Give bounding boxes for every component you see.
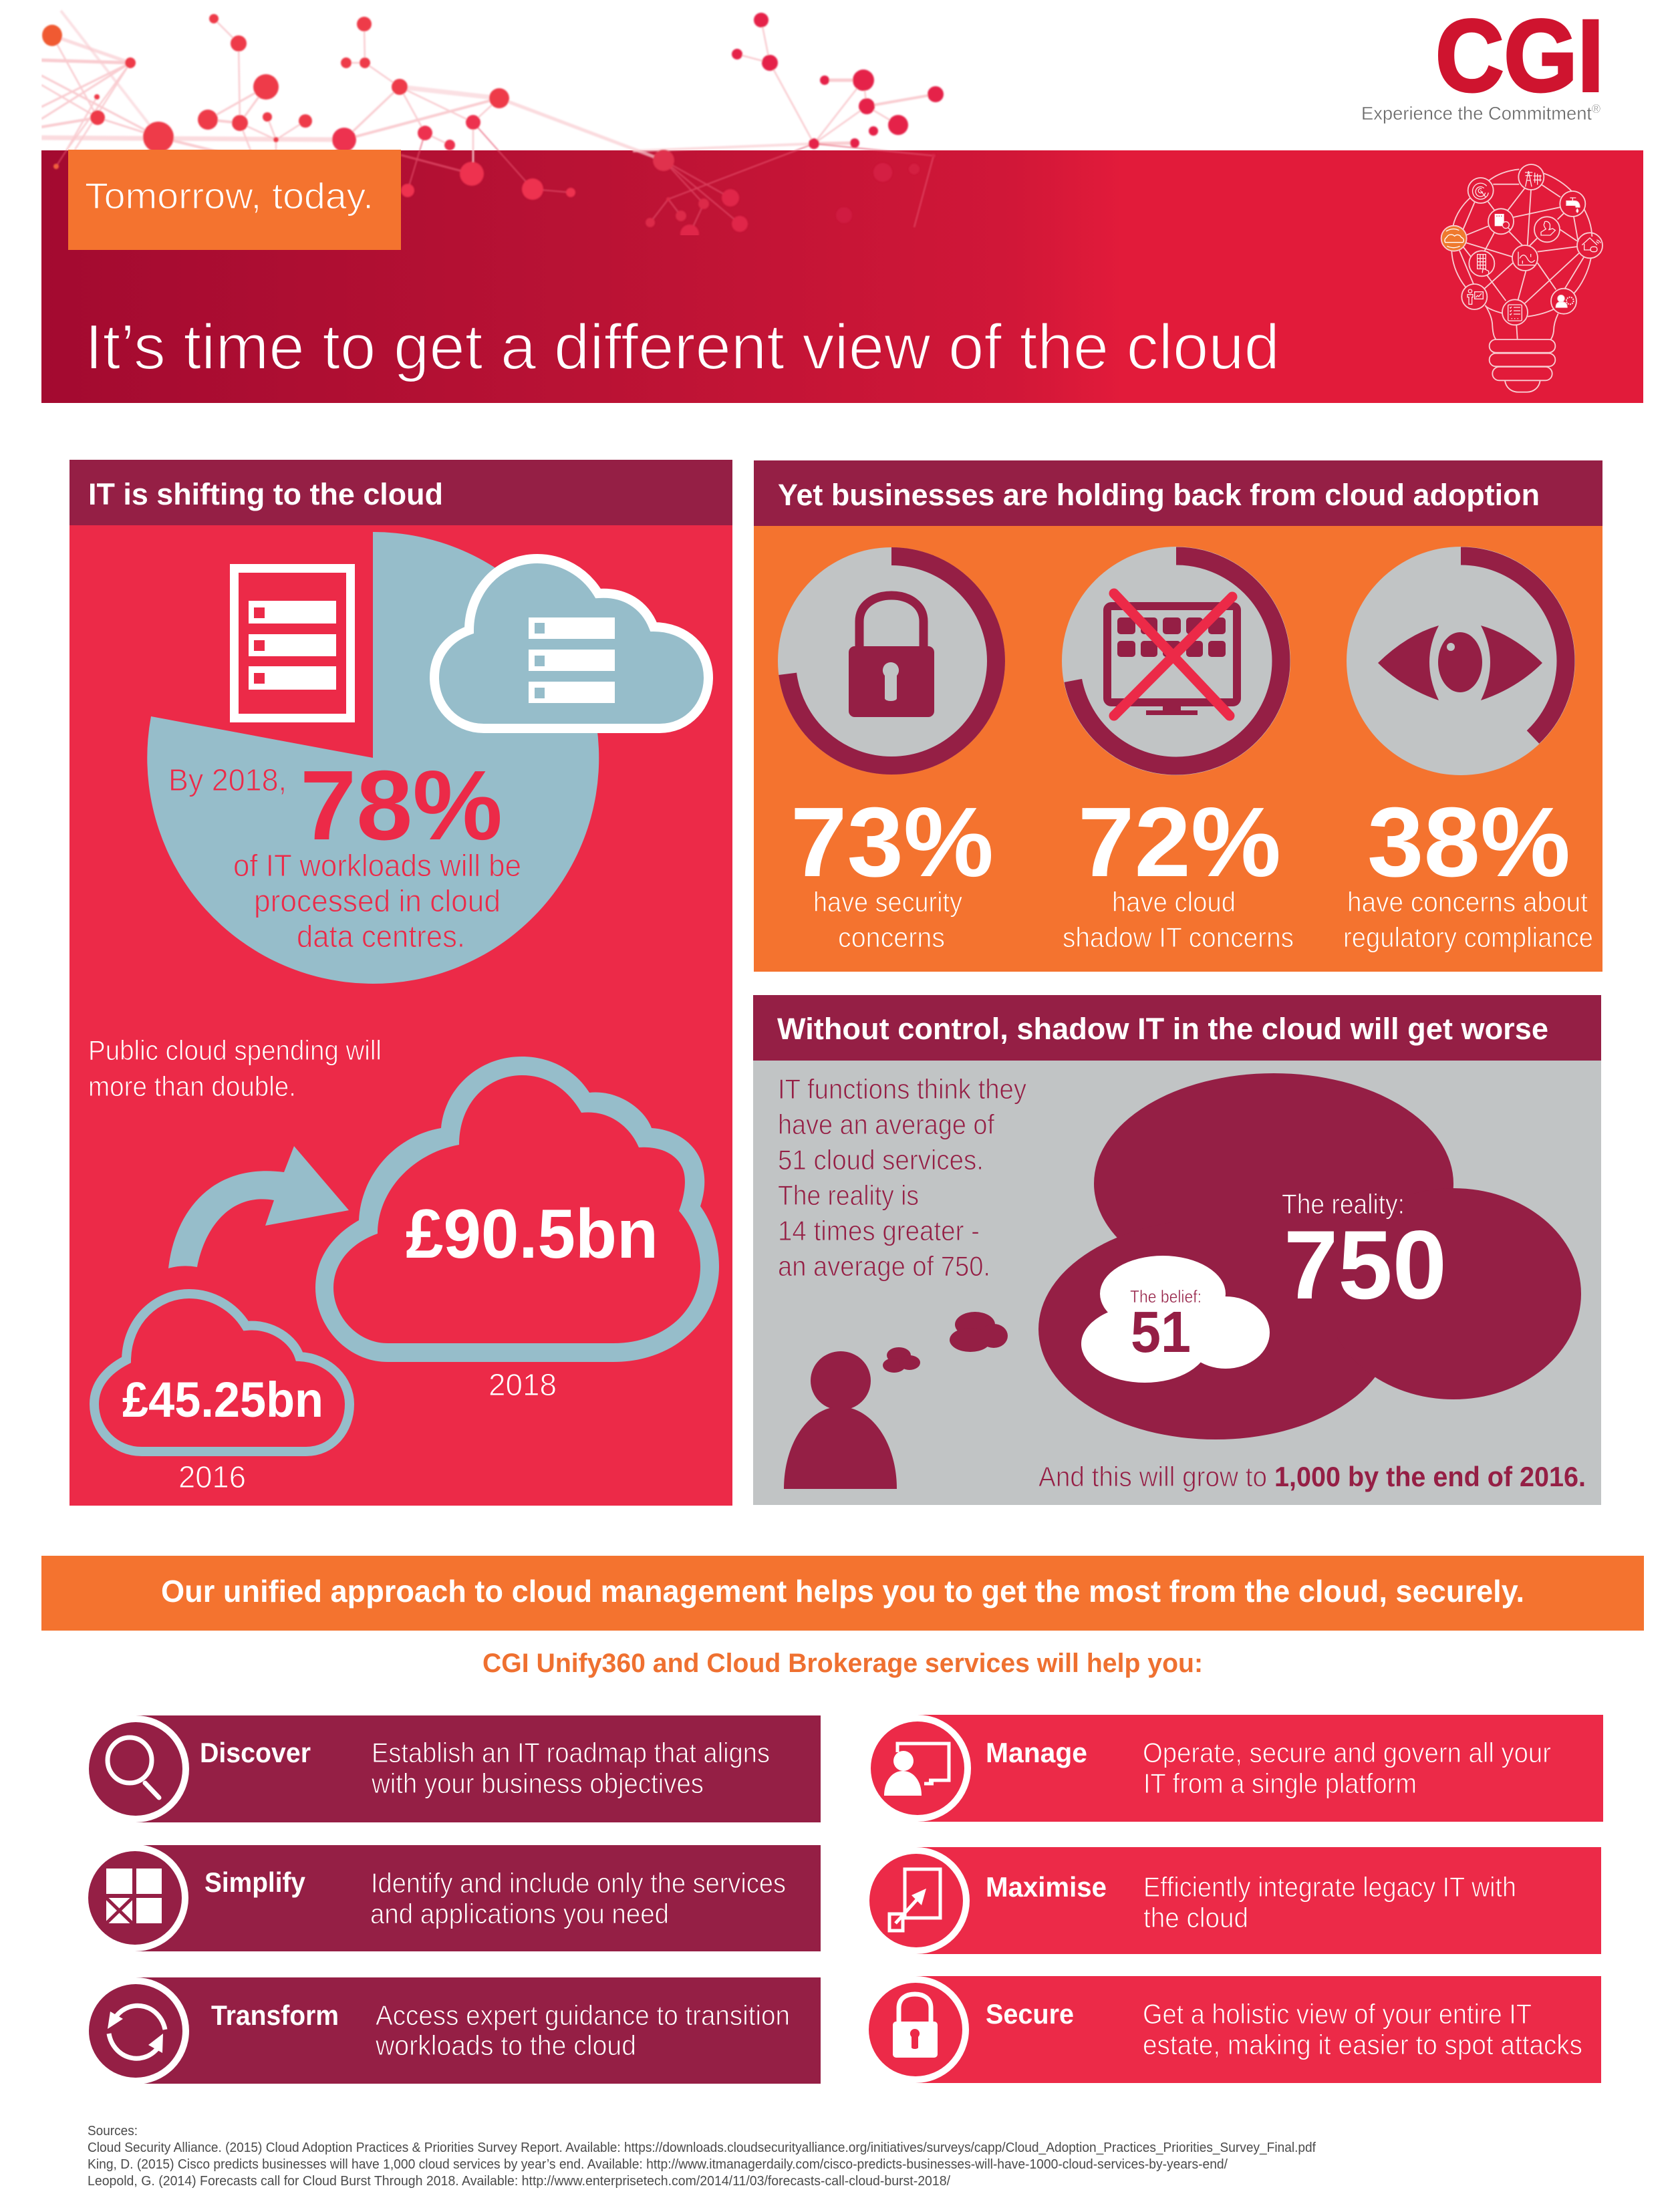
row: Simplify: and applications you need — [370, 1898, 669, 1929]
stat: 73 percent: concerns — [838, 922, 945, 953]
spending intro text: more than double. — [88, 1071, 296, 1102]
icon: person at monitor — [884, 1744, 949, 1796]
arrow: growth — [168, 1146, 349, 1268]
stat text: by 2018: By 2018, — [168, 763, 287, 797]
sources: Leopold, G. (2014) Forecasts call for Cloud Burst Through 2018. Available: http://www.enterprisetech.com/2014/11/03/forecasts-call-cloud-burst-2018/ — [88, 2174, 950, 2189]
row: Secure: Secure — [986, 1998, 1074, 2030]
subheading: CGI Unify360 and Cloud Brokerage services will help you: — [482, 1649, 1203, 1678]
icon: expand arrow — [889, 1869, 940, 1931]
body text: an average of 750. — [778, 1250, 990, 1282]
row: Transform — [82, 1977, 821, 2084]
main title: It’s time to get a different view of the cloud — [85, 311, 1280, 383]
row: Maximise: Efficiently integrate legacy IT with — [1143, 1871, 1516, 1903]
thought bubble: large — [950, 1312, 1008, 1352]
row: Transform: workloads to the cloud — [375, 2030, 636, 2061]
logo tagline: ® — [1592, 102, 1600, 116]
icon: on-premises server — [234, 568, 350, 718]
panel heading text: Yet businesses are holding back from cloud adoption — [778, 478, 1540, 512]
CGI logo: CGI — [1435, 0, 1604, 113]
body text: 51 cloud services. — [778, 1144, 984, 1176]
body text: The reality is — [778, 1180, 919, 1211]
stat: 73 percent — [791, 787, 994, 953]
sources: Cloud Security Alliance. (2015) Cloud Adoption Practices & Priorities Survey Report. Available: https://downloads.cloudsecurityalliance.org/initiatives/surveys/capp/Cloud_Adoption_Practices_Priorities_Survey_Final.pdf — [88, 2140, 1316, 2155]
panel heading text: IT is shifting to the cloud — [88, 477, 443, 511]
stat: 73 percent: have security — [813, 886, 962, 918]
row: Discover: Establish an IT roadmap that aligns — [372, 1737, 770, 1768]
row: Discover: with your business objectives — [371, 1768, 704, 1799]
stat: 72 percent — [1063, 787, 1294, 953]
icon: cloud with server — [434, 559, 708, 728]
icon: padlock — [893, 1994, 938, 2058]
panel: holding back from cloud adoption — [754, 460, 1602, 972]
tagline box — [68, 150, 401, 250]
body text: 14 times greater - — [778, 1215, 980, 1246]
spending intro text: Public cloud spending will — [88, 1034, 382, 1066]
bulb nodes — [1441, 164, 1602, 325]
row: Manage: Operate, secure and govern all your — [1143, 1737, 1551, 1768]
stat: 38 percent: regulatory compliance — [1343, 922, 1593, 953]
stat: 38 percent: have concerns about — [1347, 886, 1588, 918]
stat: 38 percent — [1343, 787, 1593, 953]
sources: King, D. (2015) Cisco predicts businesses will have 1,000 cloud services by year’s end. Available: http://www.itmanagerdaily.com/cisco-predicts-businesses-will-have-1000-cloud-services-by-years-end/ — [88, 2157, 1228, 2172]
gauge: compliance 38 percent — [1347, 547, 1575, 775]
body text: have an average of — [778, 1109, 994, 1140]
row: Manage: IT from a single platform — [1143, 1768, 1417, 1799]
icon: eye — [1378, 626, 1542, 700]
panel heading bar — [754, 460, 1602, 526]
sources: Sources: — [88, 2124, 138, 2138]
bulb node glyphs — [1445, 171, 1600, 321]
cloud: 2018 spending — [315, 1057, 719, 1362]
stat: 73 percent: 73% — [791, 787, 994, 897]
row: Secure: Get a holistic view of your entire IT — [1143, 1998, 1532, 2030]
row: Maximise: the cloud — [1143, 1902, 1248, 1933]
spending intro text — [88, 1034, 382, 1102]
stat: 72 percent: have cloud — [1112, 886, 1236, 918]
cloud: 2016 spending — [94, 1294, 350, 1451]
body text — [778, 1073, 1026, 1282]
tagline text: Tomorrow, today. — [85, 175, 374, 217]
row: Simplify: Identify and include only the services — [371, 1867, 786, 1899]
cloud: 2016 spending: £45.25bn — [122, 1372, 323, 1427]
row: Maximise: Maximise — [986, 1871, 1107, 1903]
CGI logo — [1361, 0, 1604, 124]
cloud: belief 51 — [1081, 1256, 1270, 1383]
growth note: And this will grow to — [1038, 1461, 1267, 1492]
thought bubble: small — [883, 1347, 920, 1373]
stat caption: data centres. — [297, 919, 465, 954]
cloud: belief 51: 51 — [1131, 1300, 1191, 1365]
stat caption: of IT workloads will be — [233, 848, 521, 883]
icon: padlock — [849, 595, 934, 717]
row: Transform: Access expert guidance to transition — [376, 1999, 790, 2031]
icon: monitor crossed out — [1107, 593, 1237, 716]
stat number: 78 percent: 78% — [300, 750, 503, 861]
growth note — [1038, 1461, 1586, 1492]
panel heading bar — [69, 460, 732, 525]
row: Discover — [82, 1715, 821, 1822]
label: 2018: 2018 — [488, 1367, 557, 1402]
cloud: belief 51: The belief: — [1130, 1286, 1202, 1306]
logo tagline: Experience the Commitment — [1361, 103, 1597, 124]
reality label: The reality: — [1282, 1188, 1405, 1220]
molecular network decoration — [41, 11, 944, 243]
row: Simplify — [82, 1844, 821, 1951]
panel: shadow IT will get worse — [753, 995, 1601, 1505]
body text: IT functions think they — [778, 1073, 1026, 1105]
growth note: 1,000 by the end of 2016. — [1274, 1461, 1586, 1492]
panel: IT is shifting to the cloud — [69, 460, 732, 1506]
stat caption — [233, 848, 521, 954]
icon: person — [784, 1351, 897, 1489]
panel heading bar — [753, 995, 1601, 1061]
row: Simplify: Simplify — [204, 1867, 306, 1898]
cloud: reality 750 — [1038, 1073, 1581, 1439]
orange statement band: Our unified approach to cloud management helps you to get the most from the cloud, securely. — [161, 1574, 1524, 1609]
panel heading text: Without control, shadow IT in the cloud will get worse — [777, 1012, 1548, 1046]
icon: magnifier — [108, 1738, 159, 1798]
orange statement band — [41, 1556, 1644, 1631]
label: 2016: 2016 — [178, 1460, 246, 1494]
stat: 72 percent: 72% — [1078, 787, 1281, 897]
icon: light bulb network — [1441, 164, 1602, 392]
stat: 38 percent: 38% — [1367, 787, 1570, 897]
row: Manage: Manage — [986, 1737, 1087, 1768]
reality number: 750 — [1284, 1210, 1447, 1319]
icon: four squares — [106, 1869, 162, 1923]
stat caption: processed in cloud — [254, 883, 501, 918]
row: Discover: Discover — [200, 1737, 311, 1768]
row: Transform: Transform — [211, 1999, 339, 2031]
cloud: 2018 spending: £90.5bn — [406, 1196, 658, 1273]
row: Secure — [862, 1976, 1601, 2083]
gauge: shadow IT 72 percent — [1062, 547, 1290, 775]
row: Secure: estate, making it easier to spot attacks — [1143, 2029, 1582, 2060]
header banner — [41, 150, 1643, 403]
pie chart: 78 percent — [147, 532, 599, 984]
icon: circular arrows — [108, 2006, 165, 2058]
row: Maximise — [863, 1847, 1601, 1954]
row: Manage — [864, 1715, 1603, 1822]
gauge: security 73 percent — [778, 547, 1005, 775]
stat: 72 percent: shadow IT concerns — [1063, 922, 1294, 953]
sources — [88, 2124, 1316, 2189]
